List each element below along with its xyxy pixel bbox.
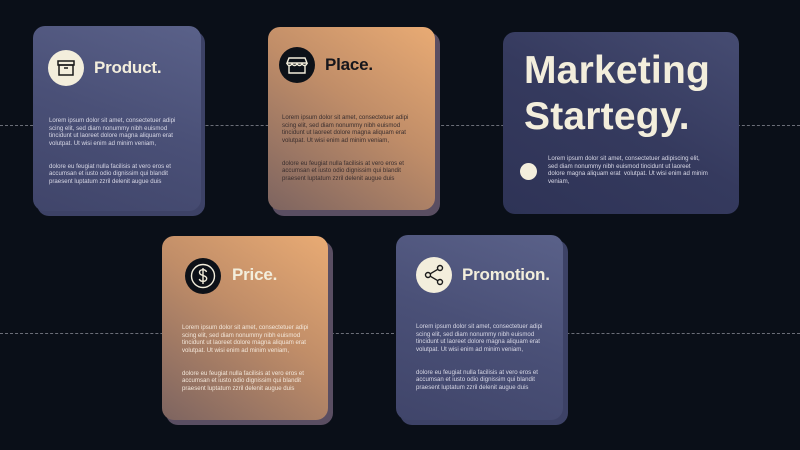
icon: share <box>416 257 452 293</box>
text: intro: Lorem ipsum dolor sit amet, consectetuer adipiscing elit, sed diam nonummy nibh euismod tincidunt ut laoreet dolore magna aliquam erat volutpat. Ut wisi enim ad minim veniam, <box>548 155 708 185</box>
panel: product <box>33 26 205 216</box>
text: place body <box>282 114 408 182</box>
panel: marketing strategy <box>503 32 739 214</box>
heading: price: Price. <box>232 265 277 284</box>
icon: box <box>48 50 84 86</box>
title <box>524 49 710 138</box>
text: place body: dolore eu feugiat nulla facilisis at vero eros et accumsan et iusto odio dignissim qui blandit praesent luptatum zzril delenit augue duis <box>282 160 404 182</box>
heading: promotion: Promotion. <box>462 265 550 284</box>
text: product body: Lorem ipsum dolor sit amet, consectetuer adipi scing elit, sed diam nonummy nibh euismod tincidunt ut laoreet dolore magna aliquam erat volutpat. Ut wisi enim ad minim veniam, <box>49 117 175 147</box>
icon: dot <box>520 163 537 180</box>
heading: product: Product. <box>94 58 161 77</box>
text: promotion body <box>416 323 542 391</box>
text: price body: Lorem ipsum dolor sit amet, consectetuer adipi scing elit, sed diam nonummy nibh euismod tincidunt ut laoreet dolore magna aliquam erat volutpat. Ut wisi enim ad minim veniam, <box>182 324 308 354</box>
text: promotion body: Lorem ipsum dolor sit amet, consectetuer adipi scing elit, sed diam nonummy nibh euismod tincidunt ut laoreet dolore magna aliquam erat volutpat. Ut wisi enim ad minim veniam, <box>416 323 542 353</box>
title: Startegy. <box>524 95 690 138</box>
panel: place <box>268 27 440 216</box>
text: place body: Lorem ipsum dolor sit amet, consectetuer adipi scing elit, sed diam nonummy nibh euismod tincidunt ut laoreet dolore magna aliquam erat volutpat. Ut wisi enim ad minim veniam, <box>282 114 408 144</box>
text: price body <box>182 324 308 392</box>
title: Marketing <box>524 49 710 92</box>
text: price body: dolore eu feugiat nulla facilisis at vero eros et accumsan et iusto odio dignissim qui blandit praesent luptatum zzril delenit augue duis <box>182 370 304 392</box>
icon: store <box>279 47 315 83</box>
text: product body <box>49 117 175 185</box>
text: product body: dolore eu feugiat nulla facilisis at vero eros et accumsan et iusto odio dignissim qui blandit praesent luptatum zzril delenit augue duis <box>49 163 171 185</box>
panel: promotion <box>396 235 568 425</box>
panel: price <box>162 236 333 425</box>
text: promotion body: dolore eu feugiat nulla facilisis at vero eros et accumsan et iusto odio dignissim qui blandit praesent luptatum zzril delenit augue duis <box>416 369 538 391</box>
icon: dollar <box>185 258 221 294</box>
heading: place: Place. <box>325 55 373 74</box>
